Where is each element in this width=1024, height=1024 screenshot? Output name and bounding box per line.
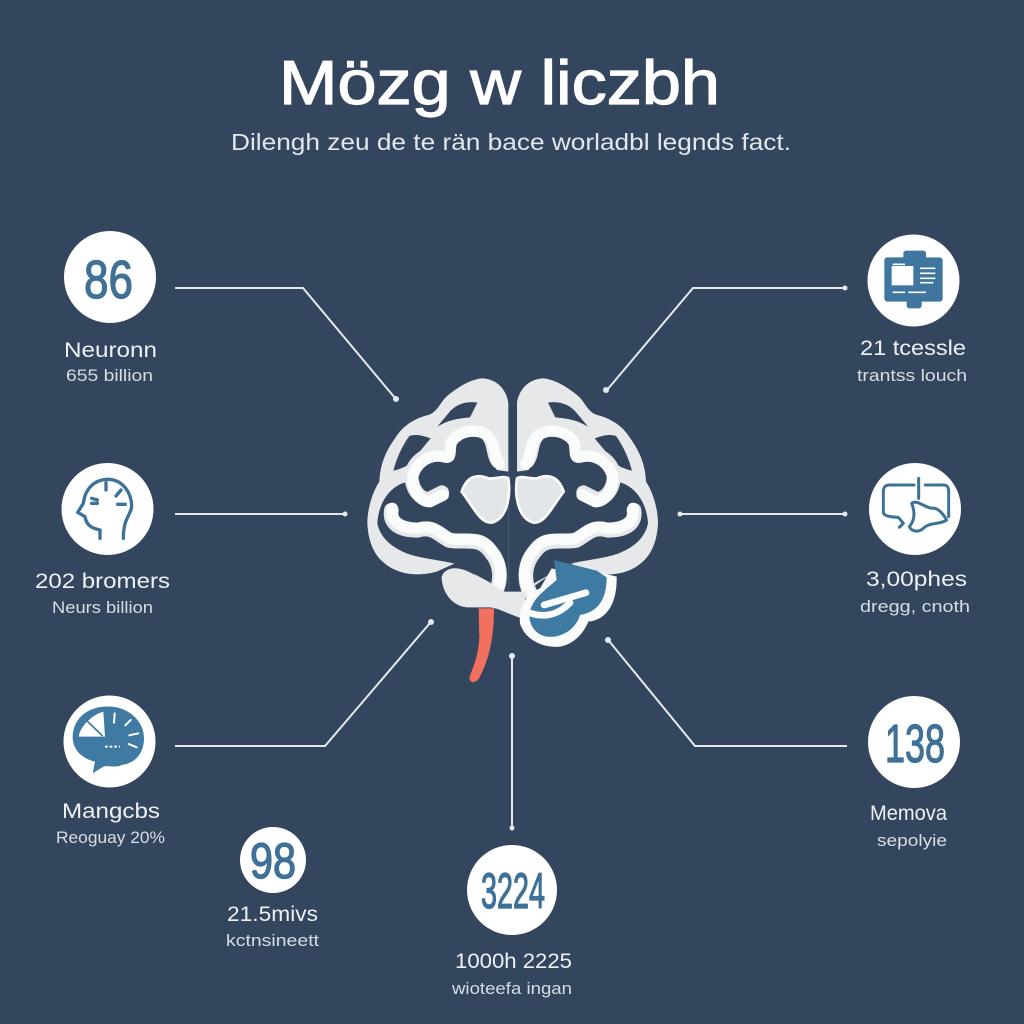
sublabel sepolyie: sepolyie [877,832,947,850]
sublabel neurons: 655 billion [66,367,153,385]
stat: 86 neurons [64,231,157,385]
icon: document chip [868,234,960,326]
connector: document stat to brain [603,286,848,393]
badge 3224 [467,845,557,935]
sublabel wioteefa ingan: wioteefa ingan [451,980,572,998]
badge 138 [868,696,960,788]
subtitle: Dilengh zeu de te rän bace worladbl legnds fact. [231,129,791,155]
stat: 3224 [451,845,572,998]
sublabel trantss louch: trantss louch [857,367,967,385]
blue cerebellum lobe [529,560,607,637]
badge 98: 98 [250,833,296,889]
connector: speech stat to brain [175,619,434,746]
sublabel dregg cnoth: dregg, cnoth [860,598,970,616]
sublabel bromers: Neurs billion [52,599,153,617]
brain illustration [367,378,658,682]
connector: map stat to brain [678,512,848,516]
stat: head icon [35,463,170,617]
label memova: Memova [870,802,947,825]
label bromers: 202 bromers [35,570,170,593]
stat: document icon [857,234,967,385]
label 21 tcessle: 21 tcessle [860,337,966,360]
badge 86 [64,231,156,323]
icon: speech brain gauge [64,696,156,788]
stat: map icon [860,463,970,616]
connector: bottom stat to brain [509,653,515,830]
spinal cord [469,608,494,682]
badge 138: 138 [885,714,945,774]
label 21.5mivs: 21.5mivs [227,903,318,926]
icon: map in frame [869,463,961,555]
badge 86: 86 [84,250,133,310]
stat: speech brain icon [56,696,165,847]
label mangcbs: Mangcbs [62,800,160,823]
icon: head [62,463,154,555]
cerebellum lobe outline [520,568,617,647]
sublabel kctnsineett: kctnsineett [226,932,319,950]
connector: head stat to brain [175,512,348,516]
badge 3224: 3224 [481,863,545,919]
connector: neurons to brain [175,288,399,402]
brainstem [442,568,527,618]
white link in lobe [531,593,586,615]
sublabel mangcbs: Reoguay 20% [56,829,165,847]
label 1000h 2225: 1000h 2225 [455,950,572,973]
stat: 98 [226,827,319,950]
label neurons: Neuronn [64,339,157,362]
title: Mözg w liczbh [279,49,720,118]
stat: 138 memory [868,696,960,850]
label 3,00phes: 3,00phes [866,568,967,591]
connector: memory stat to brain [605,637,847,746]
